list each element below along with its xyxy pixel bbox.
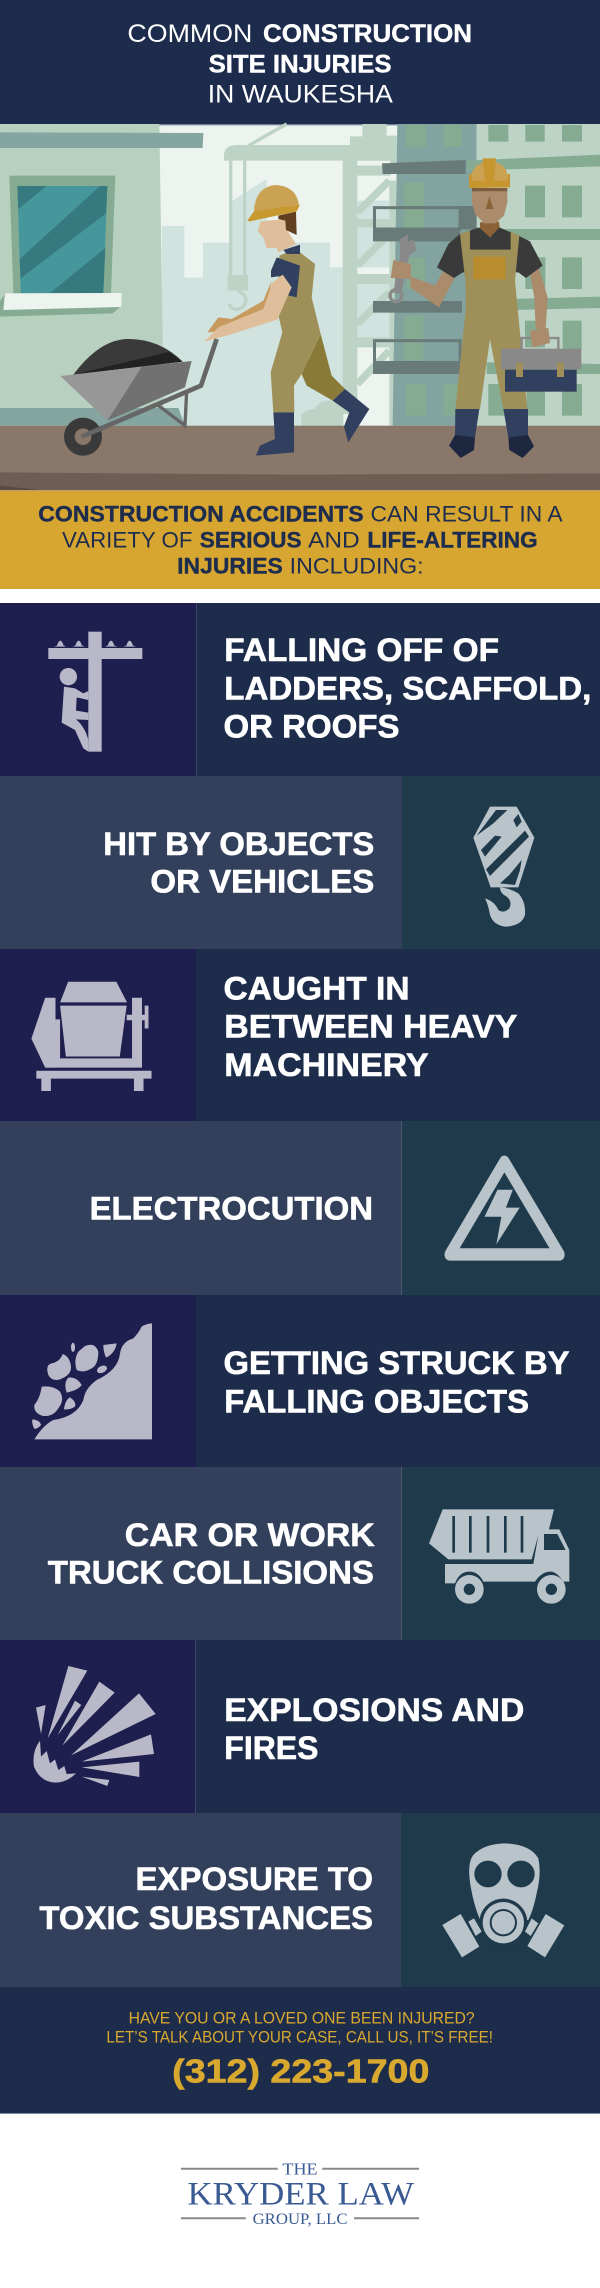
icon: wheelbarrow: [60, 339, 217, 456]
text: truck collisions: TRUCK COLLISIONS: [48, 1554, 374, 1590]
text: truck collisions: CAR OR WORK: [125, 1517, 375, 1553]
text: toxic substances: EXPOSURE TO: [136, 1861, 373, 1897]
text: electrocution: ELECTROCUTION: [90, 1190, 373, 1226]
title panel: IN WAUKESHA: [208, 80, 393, 108]
intro banner: CAN RESULT IN A: [370, 502, 563, 526]
title panel: [0, 0, 600, 124]
intro banner: SERIOUS: [200, 528, 302, 552]
text: falling: LADDERS, SCAFFOLD,: [224, 670, 591, 706]
text: hit by objects: OR VEHICLES: [150, 864, 374, 900]
intro banner: [0, 491, 600, 589]
title panel: COMMON: [127, 20, 252, 48]
text: explosions: [224, 1692, 524, 1766]
icon: cement mixer: [31, 982, 152, 1091]
logo: The Kryder Law Group, LLC: [181, 2160, 419, 2228]
footer call to action: HAVE YOU OR A LOVED ONE BEEN INJURED?: [129, 2009, 475, 2027]
icon: gas mask: [442, 1843, 564, 1957]
panel: falling: [0, 603, 600, 776]
text: caught in machinery: [224, 971, 517, 1083]
icon: rockslide: [32, 1323, 152, 1439]
icon: dump truck: [429, 1509, 569, 1604]
intro banner: CONSTRUCTION ACCIDENTS: [38, 502, 364, 526]
panel: truck collisions: [0, 1467, 600, 1640]
text: caught in machinery: CAUGHT IN: [224, 971, 410, 1007]
logo: The Kryder Law Group, LLC: GROUP, LLC: [253, 2211, 348, 2228]
footer call to action: (312) 223-1700: [172, 2053, 429, 2090]
title panel: CONSTRUCTION: [263, 20, 472, 48]
text: caught in machinery: BETWEEN HEAVY: [224, 1009, 517, 1045]
intro banner: AND: [308, 528, 360, 552]
worker holding wrench and toolbox: [390, 158, 581, 458]
text: struck by falling objects: FALLING OBJECTS: [224, 1384, 529, 1420]
icon: explosion: [33, 1666, 156, 1786]
intro banner: VARIETY OF: [62, 528, 192, 552]
icon: high voltage warning: [450, 1162, 560, 1254]
text: explosions: FIRES: [224, 1730, 318, 1766]
intro banner: INCLUDING:: [290, 554, 424, 578]
text: hit by objects: HIT BY OBJECTS: [103, 826, 374, 862]
text: struck by falling objects: [224, 1345, 570, 1420]
text: toxic substances: [39, 1861, 373, 1936]
panel: struck by falling objects: [0, 1295, 600, 1467]
text: toxic substances: TOXIC SUBSTANCES: [39, 1900, 373, 1936]
intro banner: INJURIES: [177, 554, 283, 578]
panel: toxic substances: [0, 1813, 600, 1987]
illustration: construction site with two workers: [0, 124, 600, 491]
logo: The Kryder Law Group, LLC: THE: [282, 2160, 318, 2179]
intro banner: LIFE-ALTERING: [367, 528, 538, 552]
panel: caught in machinery: [0, 949, 600, 1121]
icon: worker climbing utility pole: [48, 632, 142, 752]
text: explosions: EXPLOSIONS AND: [224, 1692, 524, 1728]
footer call to action: [0, 1987, 600, 2114]
text: caught in machinery: MACHINERY: [224, 1047, 429, 1083]
text: falling: OR ROOFS: [224, 708, 400, 744]
text: truck collisions: [48, 1517, 375, 1590]
panel: hit by objects: [0, 776, 600, 949]
title panel: SITE INJURIES: [209, 50, 392, 78]
panel: explosions: [0, 1640, 600, 1813]
text: hit by objects: [103, 826, 374, 900]
icon: crane hook: [473, 807, 534, 927]
panel: electrocution: [0, 1121, 600, 1295]
logo: The Kryder Law Group, LLC: KRYDER LAW: [188, 2176, 415, 2212]
footer call to action: LET’S TALK ABOUT YOUR CASE, CALL US, IT’S FREE!: [106, 2028, 493, 2046]
worker pushing the wheelbarrow: [204, 185, 369, 456]
text: falling: FALLING OFF OF: [224, 632, 499, 668]
text: falling: [224, 632, 591, 744]
text: struck by falling objects: GETTING STRUCK BY: [224, 1345, 570, 1381]
